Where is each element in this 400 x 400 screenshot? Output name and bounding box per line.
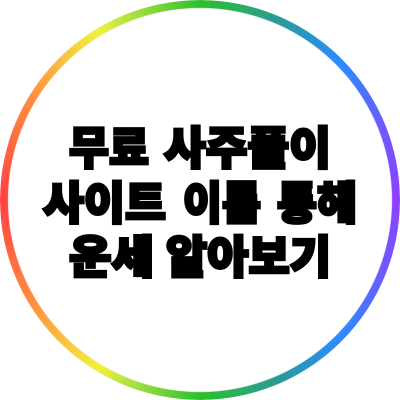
title line 3: 알아보기 xyxy=(166,232,331,283)
title line 2 xyxy=(43,178,357,229)
title line 1: 무료 xyxy=(69,123,149,174)
title line 1 xyxy=(69,123,331,174)
title line 2: 통해 xyxy=(277,178,357,229)
title line 3: 운세 xyxy=(69,232,154,283)
title line 1: 사주풀이 xyxy=(164,123,331,174)
title line 3 xyxy=(69,232,331,283)
title line 2: 사이트 xyxy=(43,178,166,229)
title line 2: 이름 xyxy=(183,178,261,229)
